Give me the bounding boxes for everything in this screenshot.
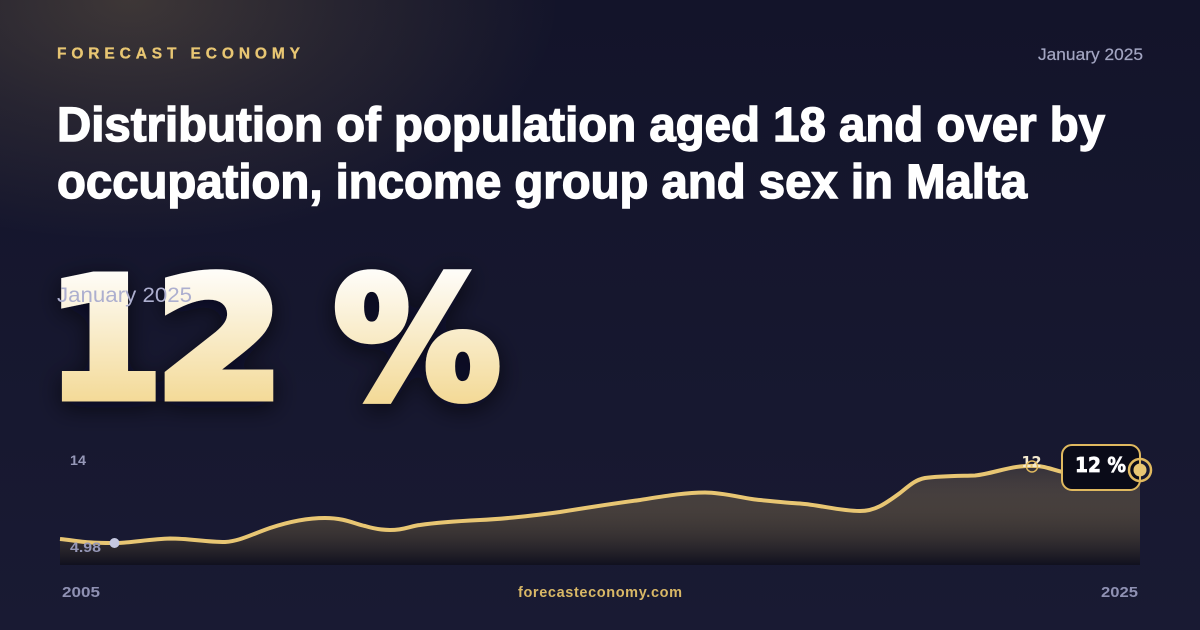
date top right: January 2025: [1038, 46, 1143, 64]
peak label: 12: [1022, 453, 1042, 471]
start year: 2005: [62, 584, 100, 601]
minimum point marker: [110, 538, 120, 548]
value tag: 12 %: [1075, 453, 1126, 477]
title: Distribution of population aged 18 and over by: [57, 99, 1105, 152]
end year: 2025: [1101, 584, 1138, 601]
line chart: [60, 445, 1151, 565]
hero date overlay: January 2025: [57, 284, 192, 307]
hero value: 1: [47, 244, 163, 437]
title: occupation, income group and sex in Malta: [57, 156, 1027, 209]
trend line: [60, 466, 1140, 543]
end point marker: [1129, 459, 1151, 481]
hero value: [47, 243, 500, 437]
axis min label: 4.98: [70, 540, 102, 555]
title: [57, 99, 1105, 209]
site url: forecasteconomy.com: [518, 585, 682, 601]
axis max label: 14: [70, 453, 87, 468]
hero value: 2: [155, 243, 284, 437]
hero value: %: [334, 244, 500, 437]
value tag: [1062, 445, 1140, 490]
brand label: FORECAST ECONOMY: [57, 46, 301, 62]
peak marker: [1026, 461, 1038, 472]
area under line: [60, 466, 1140, 565]
